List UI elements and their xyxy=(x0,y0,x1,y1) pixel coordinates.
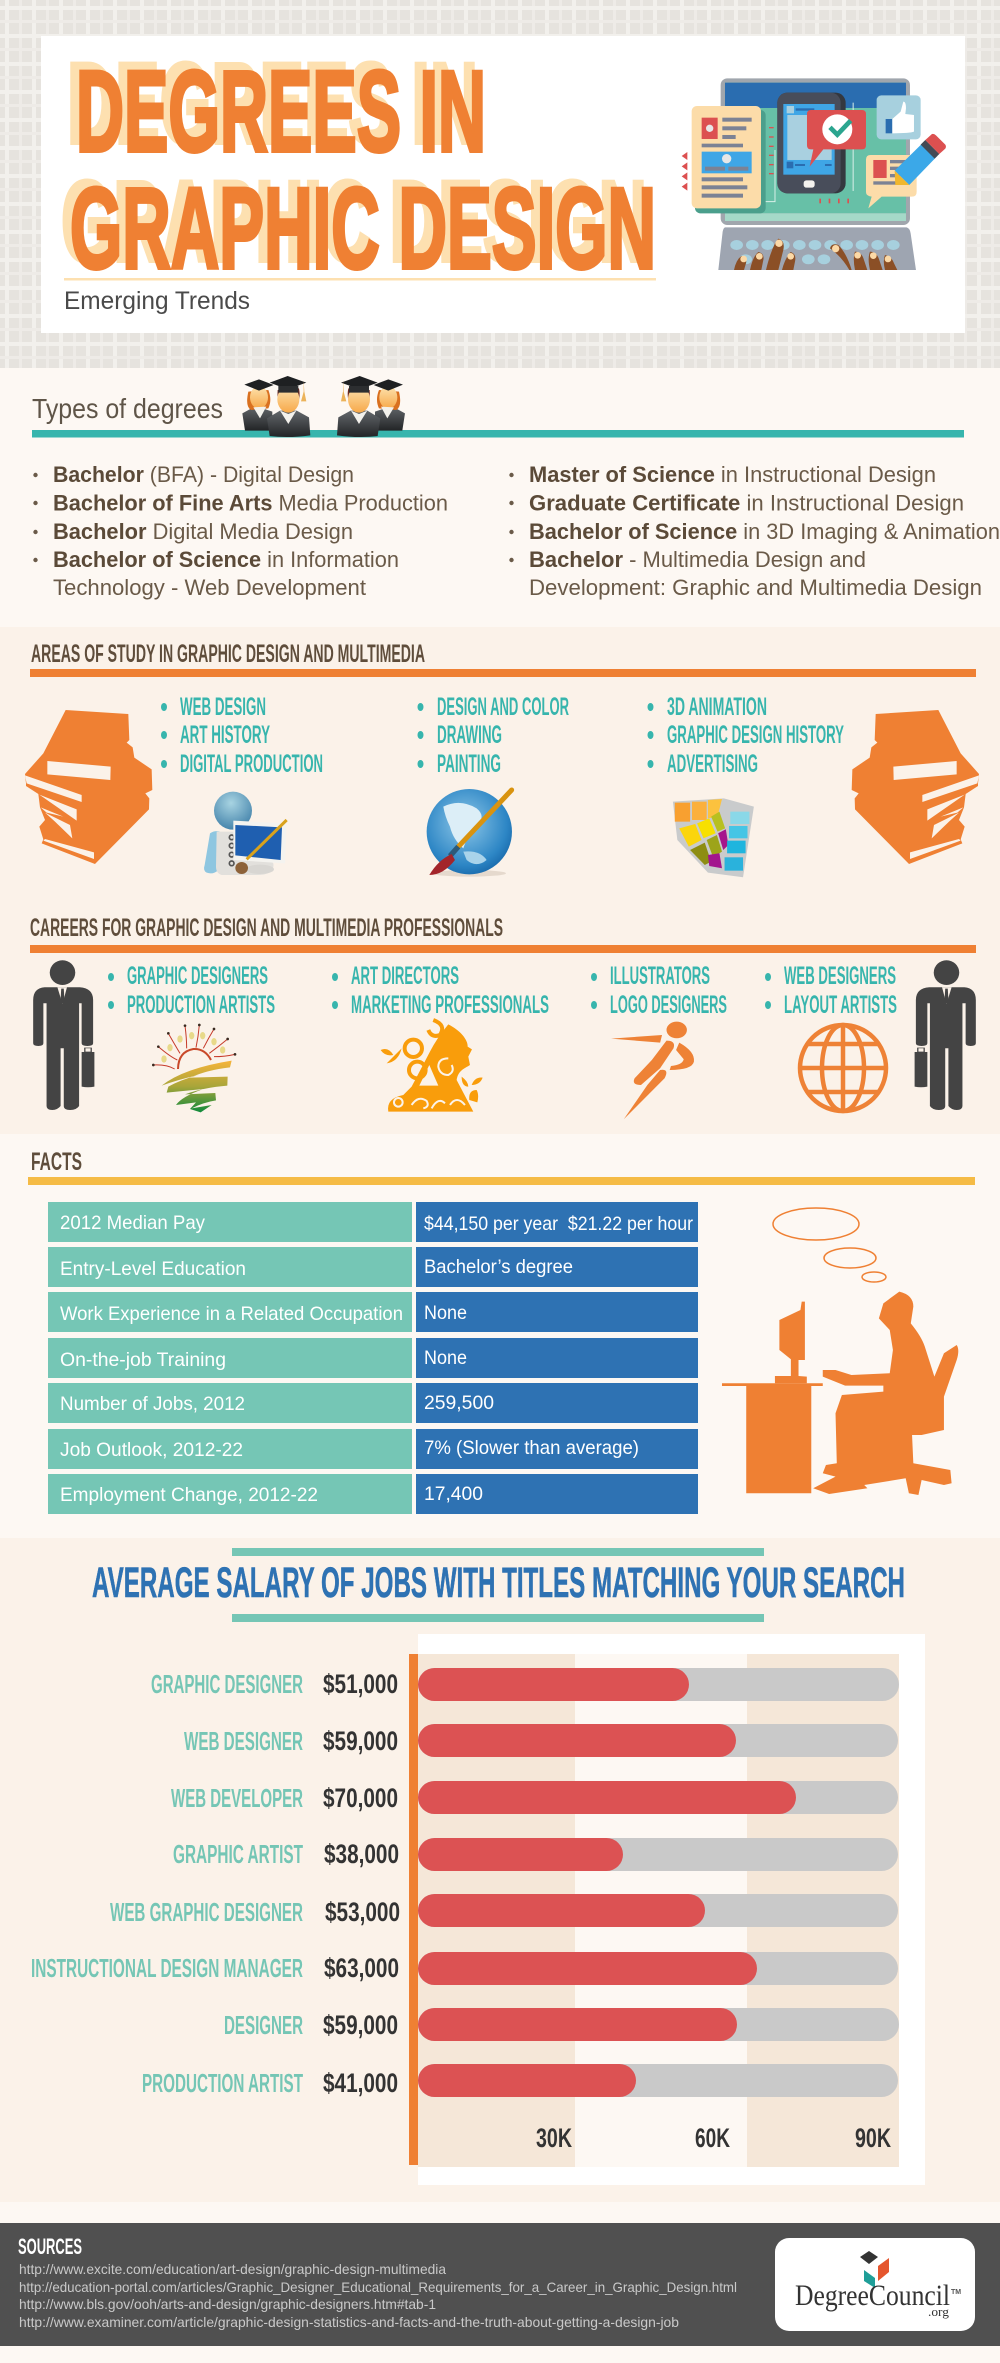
icon: sunrise logo xyxy=(152,1024,236,1112)
title: DEGREES IN xyxy=(67,40,478,168)
bar chart: salaries: $53,000 xyxy=(325,1897,400,1927)
table: job facts: Bachelor’s degree xyxy=(424,1256,573,1278)
bar chart: salaries: WEB DEVELOPER xyxy=(171,1783,303,1813)
list: careers column 2: MARKETING PROFESSIONALS xyxy=(351,991,549,1019)
table: job facts: Work Experience in a Related Occupation xyxy=(60,1303,403,1325)
heading: sources: SOURCES xyxy=(18,2234,82,2259)
list: careers column 2 xyxy=(332,962,549,1019)
logo: DegreeCouncil: TM xyxy=(951,2289,961,2296)
bar chart: salaries: PRODUCTION ARTIST xyxy=(142,2068,303,2098)
icon: computer user with brush xyxy=(204,792,287,875)
list: left degrees: Bachelor Digital Media Design xyxy=(53,519,353,544)
list: left degrees xyxy=(33,462,448,600)
list: study column 2 xyxy=(418,693,569,778)
bar chart: salaries: $51,000 xyxy=(323,1669,398,1699)
list: study column 3: 3D ANIMATION xyxy=(667,693,767,721)
list: study column 3 xyxy=(648,693,844,778)
table: job facts: Employment Change, 2012-22 xyxy=(60,1484,318,1506)
heading: types of degrees: Types of degrees xyxy=(32,393,223,424)
panel: facts xyxy=(0,1134,1000,1538)
table: job facts: None xyxy=(424,1302,467,1324)
list: careers column 2: ART DIRECTORS xyxy=(351,962,459,990)
list: study column 2: PAINTING xyxy=(437,750,501,778)
list: careers column 1: GRAPHIC DESIGNERS xyxy=(127,962,268,990)
header panel xyxy=(41,36,965,333)
icon: businessman left xyxy=(33,960,94,1110)
list: study column 1 xyxy=(161,693,323,778)
title: DEGREES IN xyxy=(76,48,486,176)
teal divider xyxy=(32,430,964,438)
icon: businessman right xyxy=(915,960,976,1110)
heading: facts: FACTS xyxy=(31,1148,82,1176)
table: job facts: $44,150 per year $21.22 per hour xyxy=(424,1213,693,1235)
table: job facts: Number of Jobs, 2012 xyxy=(60,1393,245,1415)
icon: globe outline xyxy=(800,1025,886,1111)
table: job facts: 17,400 xyxy=(424,1483,483,1505)
table: job facts: 2012 Median Pay xyxy=(60,1212,205,1234)
panel: average salary xyxy=(0,1538,1000,2202)
table: job facts: Entry-Level Education xyxy=(60,1258,246,1280)
list: study column 2: DESIGN AND COLOR xyxy=(437,693,569,721)
list: careers column 3: ILLUSTRATORS xyxy=(610,962,710,990)
list: study column 3: ADVERTISING xyxy=(667,750,758,778)
list: right degrees: Bachelor - Multimedia Design and xyxy=(529,547,866,572)
list: left degrees: Technology - Web Development xyxy=(53,575,366,600)
table: job facts: None xyxy=(424,1347,467,1369)
logo: DegreeCouncil: DegreeCouncil xyxy=(795,2279,950,2312)
table: job facts: 259,500 xyxy=(424,1392,494,1414)
list: careers column 1: PRODUCTION ARTISTS xyxy=(127,991,275,1019)
header background xyxy=(0,0,1000,368)
list: careers column 4: WEB DESIGNERS xyxy=(784,962,896,990)
list: study column 2: DRAWING xyxy=(437,721,502,749)
bar chart: salaries: WEB DESIGNER xyxy=(184,1726,303,1756)
title xyxy=(61,40,656,293)
list: right degrees: Bachelor of Science in 3D Imaging & Animation xyxy=(529,519,1000,544)
logo: DegreeCouncil xyxy=(775,2238,975,2331)
bar chart: salaries xyxy=(31,1634,925,2185)
source links: http://www.excite.com/education/art-design/graphic-design-multimedia xyxy=(19,2261,446,2277)
list: careers column 3 xyxy=(591,962,727,1019)
orange divider xyxy=(30,669,976,677)
icon: ornamental letter A with woman profile xyxy=(381,1020,483,1112)
heading: careers: CAREERS FOR GRAPHIC DESIGN AND MULTIMEDIA PROFESSIONALS xyxy=(30,914,503,942)
list: careers column 3: LOGO DESIGNERS xyxy=(610,991,727,1019)
source links: http://www.bls.gov/ooh/arts-and-design/graphic-designers.htm#tab-1 xyxy=(19,2296,436,2312)
panel: types of degrees xyxy=(0,368,1000,627)
list: right degrees: Master of Science in Instructional Design xyxy=(529,462,936,487)
list: study column 1: DIGITAL PRODUCTION xyxy=(180,750,323,778)
list: left degrees: Bachelor of Fine Arts Media Production xyxy=(53,490,448,516)
list: right degrees: Development: Graphic and Multimedia Design xyxy=(529,575,982,600)
icon: computer with apps illustration xyxy=(682,78,946,270)
panel: areas of study and careers xyxy=(0,627,1000,1134)
source links xyxy=(19,2261,737,2330)
list: right degrees xyxy=(509,462,1000,600)
icon: books right xyxy=(852,710,979,864)
list: right degrees: Graduate Certificate in Instructional Design xyxy=(529,490,964,516)
bar chart: salaries: $59,000 xyxy=(323,2010,398,2040)
bar chart: salaries: $63,000 xyxy=(324,1953,399,1983)
icon: thought bubbles xyxy=(773,1208,886,1282)
icon: graduates right xyxy=(337,376,405,437)
source links: http://www.examiner.com/article/graphic-design-statistics-and-facts-and-the-truth-about-getting-a-design-job xyxy=(19,2314,679,2330)
footer: sources xyxy=(0,2223,1000,2346)
bar chart: salaries: DESIGNER xyxy=(224,2010,303,2040)
table: job facts: On-the-job Training xyxy=(60,1349,226,1371)
bar chart: salaries: GRAPHIC DESIGNER xyxy=(151,1669,303,1699)
icon: colour swatch fan xyxy=(673,798,754,877)
icon: books left xyxy=(25,710,152,864)
bar chart: salaries: WEB GRAPHIC DESIGNER xyxy=(110,1897,303,1927)
icon: runner xyxy=(611,1022,694,1119)
title underline xyxy=(64,278,656,280)
list: careers column 4 xyxy=(765,962,897,1019)
table: job facts xyxy=(48,1202,698,1514)
list: left degrees: Bachelor of Science in Information xyxy=(53,547,399,572)
table: job facts: Job Outlook, 2012-22 xyxy=(60,1439,243,1461)
bar chart: salaries: 60K xyxy=(695,2123,730,2153)
bar chart: salaries: 30K xyxy=(536,2123,572,2153)
bar chart: salaries: INSTRUCTIONAL DESIGN MANAGER xyxy=(31,1953,303,1983)
bar chart: salaries: $41,000 xyxy=(323,2068,398,2098)
list: careers column 4: LAYOUT ARTISTS xyxy=(784,991,897,1019)
bar chart: salaries: $59,000 xyxy=(323,1726,398,1756)
icon: person at desk silhouette xyxy=(722,1292,958,1495)
bar chart: salaries: GRAPHIC ARTIST xyxy=(173,1839,303,1869)
list: study column 3: GRAPHIC DESIGN HISTORY xyxy=(667,721,844,749)
teal rule bottom xyxy=(232,1614,764,1622)
table: job facts: 7% (Slower than average) xyxy=(424,1437,639,1459)
list: study column 1: ART HISTORY xyxy=(180,721,270,749)
list: left degrees: Bachelor (BFA) - Digital Design xyxy=(53,462,354,487)
yellow divider xyxy=(28,1177,975,1185)
heading: areas of study: AREAS OF STUDY IN GRAPHIC DESIGN AND MULTIMEDIA xyxy=(31,640,425,668)
logo: DegreeCouncil: .org xyxy=(928,2304,950,2319)
orange divider careers xyxy=(30,945,976,953)
list: study column 1: WEB DESIGN xyxy=(180,693,266,721)
source links: http://education-portal.com/articles/Graphic_Designer_Educational_Requirements_for_a_Career_in_Graphic_Design.html xyxy=(19,2279,737,2295)
subtitle: Emerging Trends xyxy=(64,287,250,315)
icon: globe with brush xyxy=(427,789,512,877)
teal rule top xyxy=(232,1548,764,1556)
bar chart: salaries: $70,000 xyxy=(323,1783,398,1813)
bar chart: salaries: 90K xyxy=(855,2123,891,2153)
bar chart: salaries: $38,000 xyxy=(324,1839,399,1869)
icon: graduates left xyxy=(242,376,310,437)
list: careers column 1 xyxy=(108,962,275,1019)
